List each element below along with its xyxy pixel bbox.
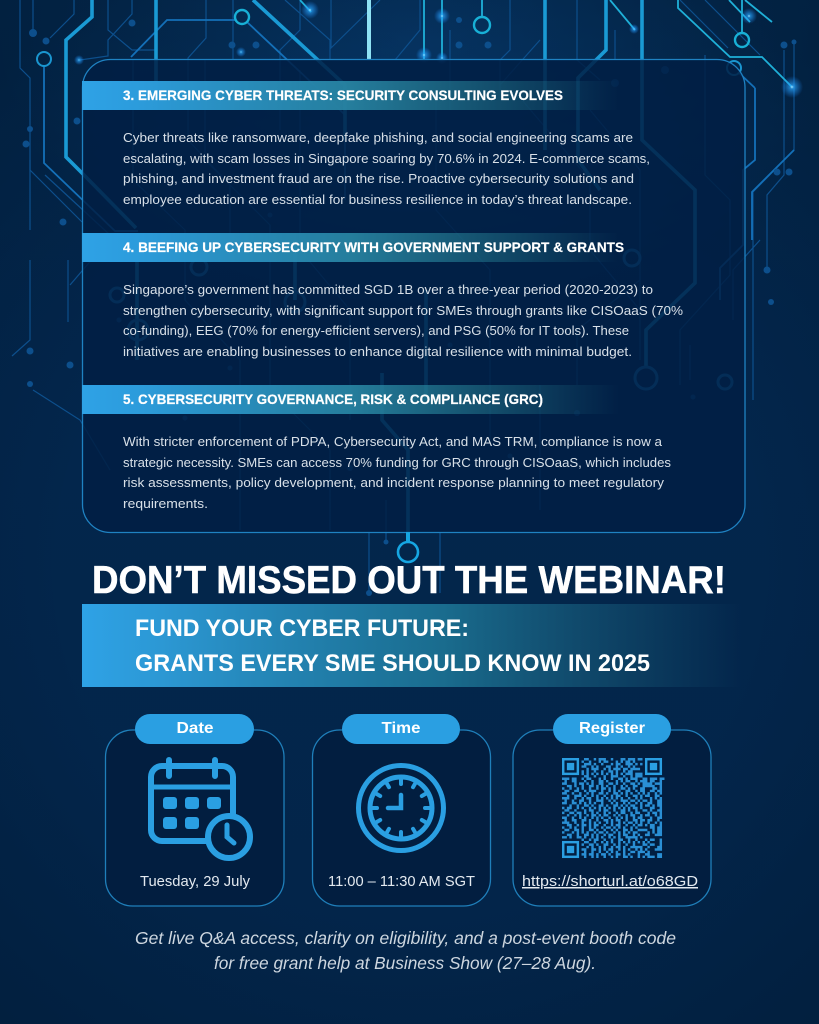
section 3 heading band <box>82 81 619 110</box>
section 5 body text: strategic necessity. SMEs can access 70% funding for GRC through CISOaaS, which includes <box>123 455 671 470</box>
section 3 body text: escalating, with scam losses in Singapore soaring by 70.6% in 2024. E-commerce scams, <box>123 151 650 166</box>
register link: https://shorturl.at/o68GD <box>522 873 698 890</box>
icon: clock <box>358 766 444 850</box>
card: date <box>106 714 284 906</box>
register pill: Register <box>579 720 645 737</box>
section 3 body text: phishing, and investment fraud are on the rise. Proactive cybersecurity solutions and <box>123 171 634 186</box>
section 3 body text: Cyber threats like ransomware, deepfake phishing, and social engineering scams are <box>123 130 633 145</box>
card: register <box>513 714 711 906</box>
section 4 body text: co-funding), EEG (70% for energy-efficient servers), and PSG (50% for IT tools). These <box>123 323 629 338</box>
time pill <box>342 714 460 744</box>
section 4 body text <box>123 282 683 359</box>
section 5 heading band: 5. CYBERSECURITY GOVERNANCE, RISK & COMPLIANCE (GRC) <box>123 391 543 407</box>
section 5 body text: risk assessments, policy development, and incident response planning to meet regulatory <box>123 475 664 490</box>
webinar headline: DON’T MISSED OUT THE WEBINAR! <box>92 559 726 602</box>
icon: calendar with clock <box>151 760 250 858</box>
section 3 body text: employee education are essential for business resilience in today’s threat landscape. <box>123 192 632 207</box>
section 3 body text <box>123 130 650 207</box>
section 5 body text <box>123 434 671 511</box>
time value: 11:00 – 11:30 AM SGT <box>328 874 475 890</box>
QR code <box>562 759 664 857</box>
panel: article sections <box>82 60 745 532</box>
date value: Tuesday, 29 July <box>140 874 251 890</box>
footer note: for free grant help at Business Show (27–28 Aug). <box>214 953 596 973</box>
section 5 body text: requirements. <box>123 496 208 511</box>
glow sparks <box>74 1 803 98</box>
section 5 body text: With stricter enforcement of PDPA, Cybersecurity Act, and MAS TRM, compliance is now a <box>123 434 663 449</box>
section 4 body text: strengthen cybersecurity, with significant support for SMEs through grants like CISOaaS (70% <box>123 303 683 318</box>
footer note: Get live Q&A access, clarity on eligibility, and a post-event booth code <box>135 928 676 948</box>
footer note <box>135 928 676 973</box>
section 4 heading band: 4. BEEFING UP CYBERSECURITY WITH GOVERNMENT SUPPORT & GRANTS <box>123 239 624 255</box>
webinar title band: FUND YOUR CYBER FUTURE: <box>135 615 469 642</box>
section 4 body text: initiatives are enabling businesses to enhance digital resilience with minimal budget. <box>123 344 632 359</box>
date pill: Date <box>176 720 214 737</box>
section 5 heading band <box>82 385 619 414</box>
circuit board pattern <box>12 0 796 596</box>
connector ring under panel <box>398 532 418 562</box>
register pill <box>553 714 671 744</box>
section 3 heading band: 3. EMERGING CYBER THREATS: SECURITY CONSULTING EVOLVES <box>123 87 563 103</box>
section 4 body text: Singapore’s government has committed SGD 1B over a three-year period (2020-2023) to <box>123 282 653 297</box>
section 4 heading band <box>82 233 624 262</box>
date pill <box>135 714 254 744</box>
time pill: Time <box>382 720 421 737</box>
card: time <box>312 714 490 906</box>
panel frame <box>82 60 745 532</box>
webinar title band: GRANTS EVERY SME SHOULD KNOW IN 2025 <box>135 650 650 677</box>
webinar title band <box>82 604 742 687</box>
